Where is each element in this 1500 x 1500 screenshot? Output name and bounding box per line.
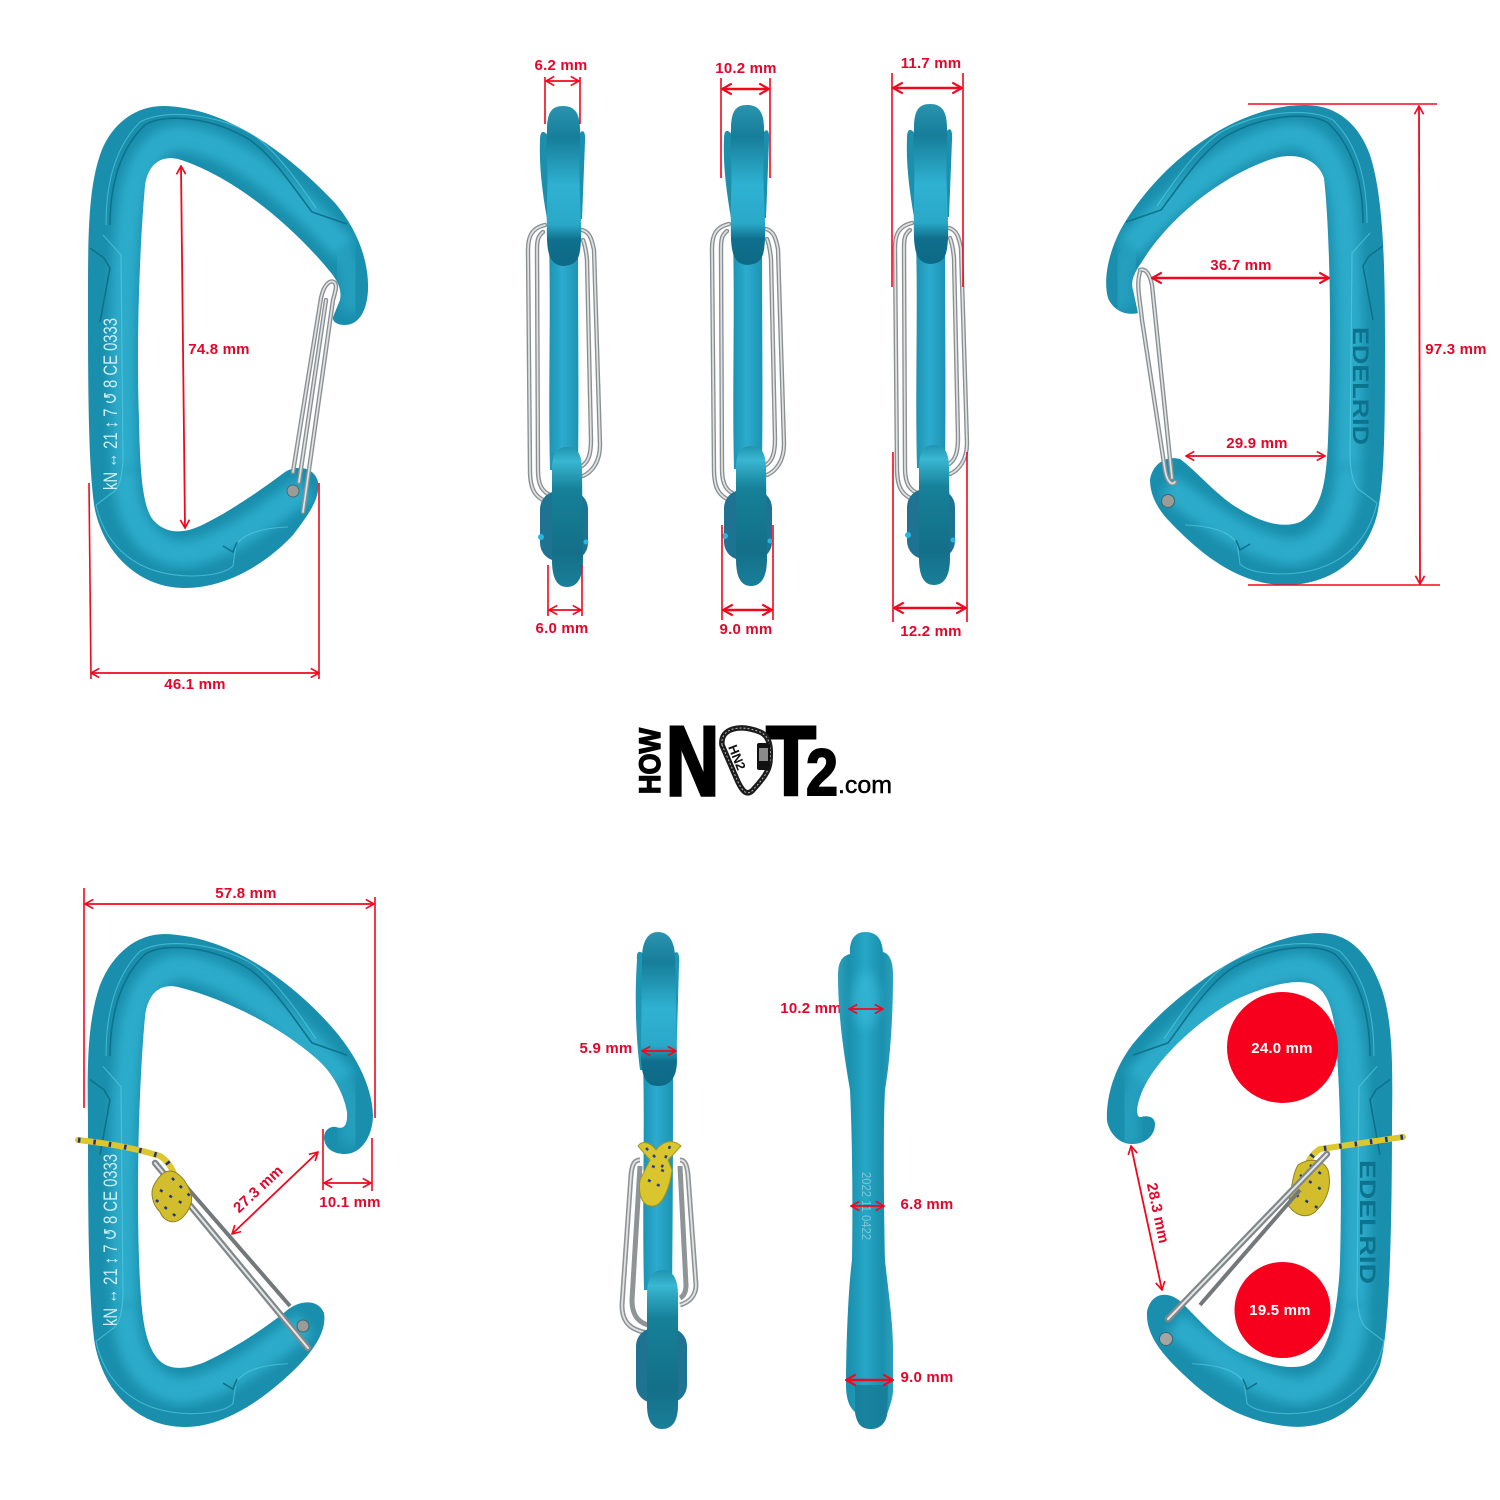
dimension: 29.9 mm — [1186, 435, 1325, 456]
dimension: 29.9 mm: 29.9 mm — [1226, 435, 1288, 452]
cord and knot — [78, 1140, 192, 1222]
top highlight — [852, 972, 880, 1028]
logo numeral: 2: 2 — [806, 735, 838, 809]
date mark: 2022 11 0422 — [859, 1172, 874, 1240]
circle gauge: 19.5 mm: 19.5 mm — [1249, 1302, 1311, 1319]
dimension: 97.3 mm: 97.3 mm — [1425, 341, 1487, 358]
wire gate — [1168, 1154, 1327, 1319]
stem — [643, 1060, 673, 1290]
body — [88, 934, 373, 1427]
body shading and grooves — [90, 944, 353, 1414]
dimension: 10.2 mm top: 10.2 mm — [715, 60, 777, 77]
body — [1107, 933, 1392, 1427]
dimension: 11.7 mm: 11.7 mm — [901, 55, 961, 72]
logo letter: T: T — [766, 706, 816, 816]
dimension: 74.8 mm: 74.8 mm — [188, 341, 250, 358]
dimension: 11.7 mm — [892, 55, 963, 287]
bottom plate — [636, 1328, 687, 1403]
spine shoulders — [636, 952, 679, 1070]
wire gate — [1138, 270, 1175, 484]
dimension: 27.3 mm — [230, 1152, 318, 1234]
carabiner: top right, gate closed — [1106, 105, 1385, 585]
circle gauge: 24.0 mm — [1227, 992, 1338, 1103]
spine body — [838, 932, 893, 1429]
body — [1106, 105, 1385, 585]
carabiner: top left, gate closed — [88, 106, 368, 588]
dimension: 6.0 mm — [536, 565, 588, 637]
dimension: 57.8 mm — [84, 885, 375, 1118]
side view 4: gate and cord — [622, 932, 696, 1429]
dimension: 74.8 mm — [181, 166, 250, 528]
side view 5: spine — [838, 932, 893, 1429]
rivet — [297, 1320, 309, 1332]
circle gauge: 24.0 mm: 24.0 mm — [1251, 1040, 1313, 1057]
side view 3 — [895, 104, 967, 585]
dimension: 28.3 mm: 28.3 mm — [1143, 1181, 1172, 1245]
logo: HowNot2.com — [634, 706, 892, 816]
bottom dome — [647, 1270, 678, 1429]
side view 1 — [528, 106, 600, 587]
dimension: 10.1 mm — [319, 1129, 381, 1211]
embossed brand: EDELRID — [1348, 327, 1373, 445]
logo carabiner — [722, 728, 770, 793]
body shading and grooves — [90, 114, 353, 576]
dimension: 9.0 mm spine — [846, 1369, 953, 1386]
top dome — [641, 932, 677, 1086]
dimension: 6.2 mm: 6.2 mm — [535, 57, 587, 74]
bottom shade — [855, 1385, 888, 1429]
circle gauge: 19.5 mm — [1234, 1262, 1330, 1358]
dimension: 46.1 mm — [89, 483, 319, 693]
logo letter: N: N — [666, 706, 719, 816]
dimension: 9.0 mm spine: 9.0 mm — [901, 1369, 953, 1386]
dimension: 5.9 mm: 5.9 mm — [580, 1040, 632, 1057]
dimension: 6.2 mm — [535, 57, 587, 124]
dimension: 10.2 mm arrow — [849, 1008, 883, 1010]
dimension: 12.2 mm: 12.2 mm — [900, 623, 962, 640]
dimension: 27.3 mm: 27.3 mm — [230, 1162, 287, 1217]
dimension: 36.7 mm: 36.7 mm — [1210, 257, 1272, 274]
logo carabiner: HN2 — [725, 743, 749, 772]
carabiner: bottom left, gate open — [78, 934, 373, 1427]
dimension: 12.2 mm — [893, 452, 967, 640]
cord and knot — [1288, 1137, 1403, 1216]
embossed brand: EDELRID — [1355, 1160, 1380, 1284]
dimension: 10.2 mm top — [715, 60, 777, 178]
side view 2 — [712, 105, 784, 586]
wire gate — [622, 1160, 696, 1333]
body — [88, 106, 368, 588]
dimension: 5.9 mm — [580, 1040, 676, 1057]
body shading and grooves — [1120, 112, 1383, 574]
dimension: 28.3 mm — [1131, 1146, 1172, 1290]
dimension: 9.0 mm: 9.0 mm — [720, 621, 772, 638]
rivet — [1160, 1332, 1172, 1346]
body shading and grooves — [1127, 944, 1390, 1414]
dimension: 97.3 mm — [1248, 104, 1487, 585]
logo word: HOW: HOW — [634, 727, 667, 794]
dimension: 10.1 mm: 10.1 mm — [319, 1194, 381, 1211]
wire gate — [155, 1163, 308, 1348]
carabiner: bottom right, gate open — [1107, 933, 1403, 1427]
dimension: 6.8 mm — [851, 1196, 953, 1213]
wire gate — [293, 282, 336, 512]
logo suffix: .com: .com — [838, 772, 892, 799]
embossed rating text: kN ↔ 21 ↕ 7 ↺ 8 CE 0333 — [101, 1154, 122, 1326]
embossed rating text: kN ↔ 21 ↕ 7 ↺ 8 CE 0333 — [101, 318, 122, 490]
dimension label: 10.2 mm (partly behind spine): 10.2 mm — [780, 1000, 842, 1017]
dimension: 9.0 mm — [720, 525, 773, 638]
dimension: 6.0 mm: 6.0 mm — [536, 620, 588, 637]
dimension: 6.8 mm: 6.8 mm — [901, 1196, 953, 1213]
cord knot — [638, 1142, 681, 1206]
dimension: 57.8 mm: 57.8 mm — [215, 885, 277, 902]
rivet — [287, 485, 299, 497]
rivet — [1162, 494, 1174, 508]
dimension: 46.1 mm: 46.1 mm — [164, 676, 226, 693]
